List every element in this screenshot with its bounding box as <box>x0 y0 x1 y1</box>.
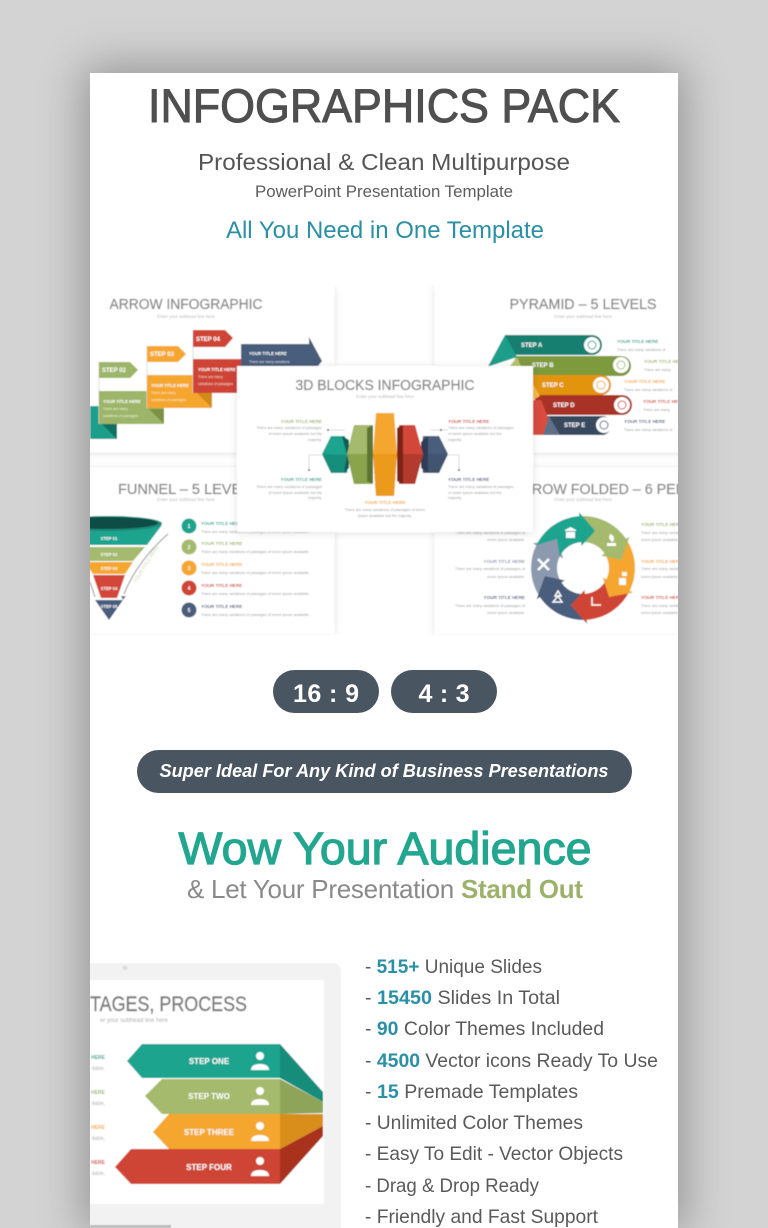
feature list: - Easy To Edit - Vector Objects <box>365 1143 623 1165</box>
right labels: There are many variations <box>641 567 685 571</box>
step 03 orange: variations of passages <box>151 398 186 402</box>
funnel list: YOUR TITLE HERE <box>201 541 242 546</box>
subhead: pyramid: Enter your subhead line here <box>554 314 612 319</box>
heading: 3D blocks: 3D BLOCKS INFOGRAPHIC <box>296 377 475 394</box>
step four <box>115 1126 323 1184</box>
feature list <box>365 956 658 1228</box>
heading: funnel: FUNNEL – 5 LEVELS <box>118 481 259 498</box>
sub headline: & Let Your Presentation Stand Out <box>187 874 583 904</box>
funnel list: 1 <box>188 524 191 530</box>
step 05 navy arrow <box>241 337 322 366</box>
heading: arrow folded: ARROW FOLDED – 6 PERCENT <box>512 481 725 498</box>
left labels: There are many variations of passages of <box>455 531 526 535</box>
subtitle: Professional & Clean Multipurpose <box>198 149 570 175</box>
step 04 red: variations of passages <box>198 382 233 386</box>
left labels: There are many variations of passages of <box>455 604 526 608</box>
pyramid labels <box>616 339 678 432</box>
step E bar: STEP E <box>564 423 585 429</box>
subhead: 3D blocks: Enter your subhead line here <box>356 394 414 399</box>
step A bar: STEP A <box>521 343 543 349</box>
subhead: stages process: er your subhead line here <box>100 1018 169 1024</box>
funnel graphic: YOUR TITLE HERE <box>133 545 160 584</box>
right labels: YOUR TITLE HERE <box>641 522 682 527</box>
title: INFOGRAPHICS PACK <box>148 79 620 132</box>
pyramid labels: YOUR TITLE HERE <box>617 339 658 344</box>
headline: Wow Your Audience <box>178 823 592 874</box>
right labels: lorem ipsum available. <box>641 538 679 542</box>
pyramid labels: There are many variations of <box>617 348 666 352</box>
left labels <box>455 531 526 615</box>
funnel list: 5 <box>188 608 191 614</box>
white page sheet <box>90 73 678 1228</box>
block labels <box>256 419 514 518</box>
step 05 navy arrow: There are many variations <box>249 360 290 364</box>
tagline: All You Need in One Template <box>226 217 544 244</box>
funnel list: 4 <box>188 586 191 592</box>
panel: arrow folded 6 percent <box>432 466 678 633</box>
ratio badge 4:3 <box>391 670 497 713</box>
step D bar: STEP D <box>553 403 575 409</box>
subtitle line two: PowerPoint Presentation Template <box>255 183 513 201</box>
funnel list: YOUR TITLE HERE <box>201 604 242 609</box>
feature list: - 4500 Vector icons Ready To Use <box>365 1050 658 1072</box>
block labels: YOUR TITLE HERE <box>364 500 406 505</box>
stub labels: HERE <box>91 1090 106 1096</box>
step three: STEP THREE <box>184 1128 235 1137</box>
step 03 orange: YOUR TITLE HERE <box>151 383 189 388</box>
infographic canvas <box>90 88 678 1228</box>
pyramid labels: YOUR TITLE HERE <box>643 399 684 404</box>
stub labels: ilable, <box>92 1101 105 1107</box>
pyramid labels: There are many variations of <box>624 428 673 432</box>
left labels: lorem ipsum available. <box>487 611 525 615</box>
panel: pyramid 5 levels <box>435 285 688 452</box>
step C bar <box>525 375 611 395</box>
right labels <box>640 522 678 615</box>
step 04 red: STEP 04 <box>196 337 221 343</box>
block labels: YOUR TITLE HERE <box>448 477 489 482</box>
feature list: - 90 Color Themes Included <box>365 1018 604 1040</box>
funnel graphic: STEP 05 <box>101 604 118 609</box>
ratio badge 16:9 <box>273 670 379 713</box>
stub labels: ilable, <box>92 1171 105 1177</box>
step 04 red: YOUR TITLE HERE <box>198 367 236 372</box>
block labels: There are many variations of passages <box>448 426 514 430</box>
funnel list: There are many variations of passages of lorem ipsum available. <box>201 571 310 575</box>
subhead: funnel: Enter your subhead line here <box>157 497 215 502</box>
feature list: - 15 Premade Templates <box>365 1081 578 1103</box>
slide collage <box>90 288 678 633</box>
step 02 green: There are many <box>103 407 128 411</box>
funnel list: There are many variations of passages of lorem ipsum available. <box>201 592 310 596</box>
block labels: There are many variations of passages <box>448 485 514 489</box>
cycle icons <box>538 527 627 605</box>
heading: arrow infographic: ARROW INFOGRAPHIC <box>110 296 263 313</box>
right labels: There are many variations <box>641 531 685 535</box>
step 03 orange <box>147 346 212 408</box>
block labels: majority. <box>308 496 322 500</box>
right labels: lorem ipsum available. <box>641 575 679 579</box>
stub labels: ilable, <box>92 1136 105 1142</box>
funnel list: There are many variations of passages of lorem ipsum available. <box>201 613 310 617</box>
step three <box>153 1114 323 1149</box>
step two <box>145 1079 323 1114</box>
funnel graphic <box>90 515 169 620</box>
block labels: of lorem ipsum available but the <box>448 491 502 495</box>
funnel graphic: STEP 04 <box>101 586 118 591</box>
block labels: of lorem ipsum available but the <box>448 432 502 436</box>
banner pill: Super Ideal For Any Kind of Business Presentations <box>160 760 608 781</box>
funnel list: 3 <box>188 566 191 572</box>
stub labels: ilable, <box>92 1066 105 1072</box>
block labels: There are many variations of passages <box>256 485 322 489</box>
step B bar: STEP B <box>532 363 554 369</box>
step D bar <box>535 395 632 415</box>
pyramid labels: There are many <box>644 368 671 372</box>
heading: pyramid: PYRAMID – 5 LEVELS <box>510 296 656 313</box>
step 04 red <box>193 330 243 393</box>
block labels: of lorem ipsum available but the <box>268 432 322 436</box>
block labels: majority. <box>448 438 462 442</box>
funnel list: There are many variations of passages of lorem ipsum available. <box>201 530 310 534</box>
pyramid labels: There are many variations of <box>624 388 673 392</box>
pyramid labels: YOUR TITLE HERE <box>624 419 665 424</box>
step two: STEP TWO <box>188 1092 230 1101</box>
feature list: - 15450 Slides In Total <box>365 987 560 1009</box>
stub labels: HERE <box>91 1160 106 1166</box>
stub labels <box>91 1055 106 1177</box>
feature list: - Drag & Drop Ready <box>365 1175 539 1197</box>
block labels: majority. <box>308 438 322 442</box>
stub labels: HERE <box>91 1125 106 1131</box>
panel: funnel 5 levels <box>90 466 336 633</box>
step 03 orange: STEP 03 <box>150 352 175 358</box>
pyramid labels: YOUR TITLE HERE <box>624 379 665 384</box>
step 02 green: YOUR TITLE HERE <box>103 399 141 404</box>
panel: 3D blocks infographic <box>237 366 533 532</box>
funnel list: YOUR TITLE HERE <box>201 521 242 526</box>
step one: STEP ONE <box>189 1057 230 1066</box>
right labels: YOUR TITLE HERE <box>641 595 682 600</box>
ratio badge 16:9: 16 : 9 <box>293 680 359 708</box>
right labels: YOUR TITLE HERE <box>641 559 682 564</box>
funnel list: YOUR TITLE HERE <box>201 583 242 588</box>
laptop slide mockup <box>90 963 341 1228</box>
3D block chart <box>308 413 460 496</box>
left labels: lorem ipsum available. <box>487 575 525 579</box>
feature list: - Unlimited Color Themes <box>365 1112 583 1134</box>
banner pill <box>137 750 632 793</box>
pyramid labels: There are many <box>643 408 670 412</box>
funnel list: YOUR TITLE HERE <box>201 562 242 567</box>
pyramid labels: YOUR TITLE HERE <box>644 359 685 364</box>
step 02 green: STEP 02 <box>102 368 127 374</box>
step E bar <box>545 416 612 435</box>
step four: STEP FOUR <box>186 1163 232 1172</box>
block labels: majority. <box>448 496 462 500</box>
funnel graphic: STEP 03 <box>101 566 118 571</box>
subhead: arrow folded: Enter your subhead line here <box>554 497 612 502</box>
block labels: ipsum available but the majority. <box>358 514 412 518</box>
step 03 orange: There are many <box>151 391 176 395</box>
block labels: of lorem ipsum available but the <box>268 491 322 495</box>
feature list: - Friendly and Fast Support <box>365 1206 599 1228</box>
step one <box>127 1044 323 1102</box>
block labels: YOUR TITLE HERE <box>281 419 322 424</box>
left labels: YOUR TITLE HERE <box>484 559 525 564</box>
subhead: arrow infographic: Enter your subhead line here <box>157 314 215 319</box>
block labels: There are many variations of passages <box>256 426 322 430</box>
funnel list <box>182 518 310 618</box>
panel: arrow infographic <box>80 285 334 452</box>
funnel list: 2 <box>188 545 191 551</box>
heading: stages process: TAGES, PROCESS <box>90 993 247 1016</box>
stub labels: HERE <box>91 1055 106 1061</box>
block labels: YOUR TITLE HERE <box>281 477 322 482</box>
funnel graphic: STEP 01 <box>101 536 118 541</box>
left labels: lorem ipsum available. <box>487 538 525 542</box>
step 02 green <box>99 362 164 424</box>
block labels: YOUR TITLE HERE <box>448 419 489 424</box>
step 04 red: There are many <box>198 375 223 379</box>
right labels: There are many variations <box>641 604 685 608</box>
step 01 teal <box>90 406 117 439</box>
cycle chart <box>530 512 636 624</box>
step A bar <box>505 335 602 355</box>
block labels: There are many variations of passages of lorem <box>345 508 425 512</box>
step C bar: STEP C <box>542 383 564 389</box>
left labels: There are many variations of passages of <box>455 567 526 571</box>
right labels: lorem ipsum available. <box>641 611 679 615</box>
pyramid facets <box>485 335 560 435</box>
step B bar <box>515 356 631 376</box>
step 05 navy arrow: YOUR TITLE HERE <box>249 351 287 356</box>
left labels: YOUR TITLE HERE <box>484 595 525 600</box>
step 02 green: variations of passages <box>103 414 138 418</box>
ratio badge 4:3: 4 : 3 <box>418 680 470 708</box>
feature list: - 515+ Unique Slides <box>365 956 542 978</box>
funnel graphic: STEP 02 <box>101 552 118 557</box>
funnel list: There are many variations of passages of lorem ipsum available. <box>201 550 310 554</box>
